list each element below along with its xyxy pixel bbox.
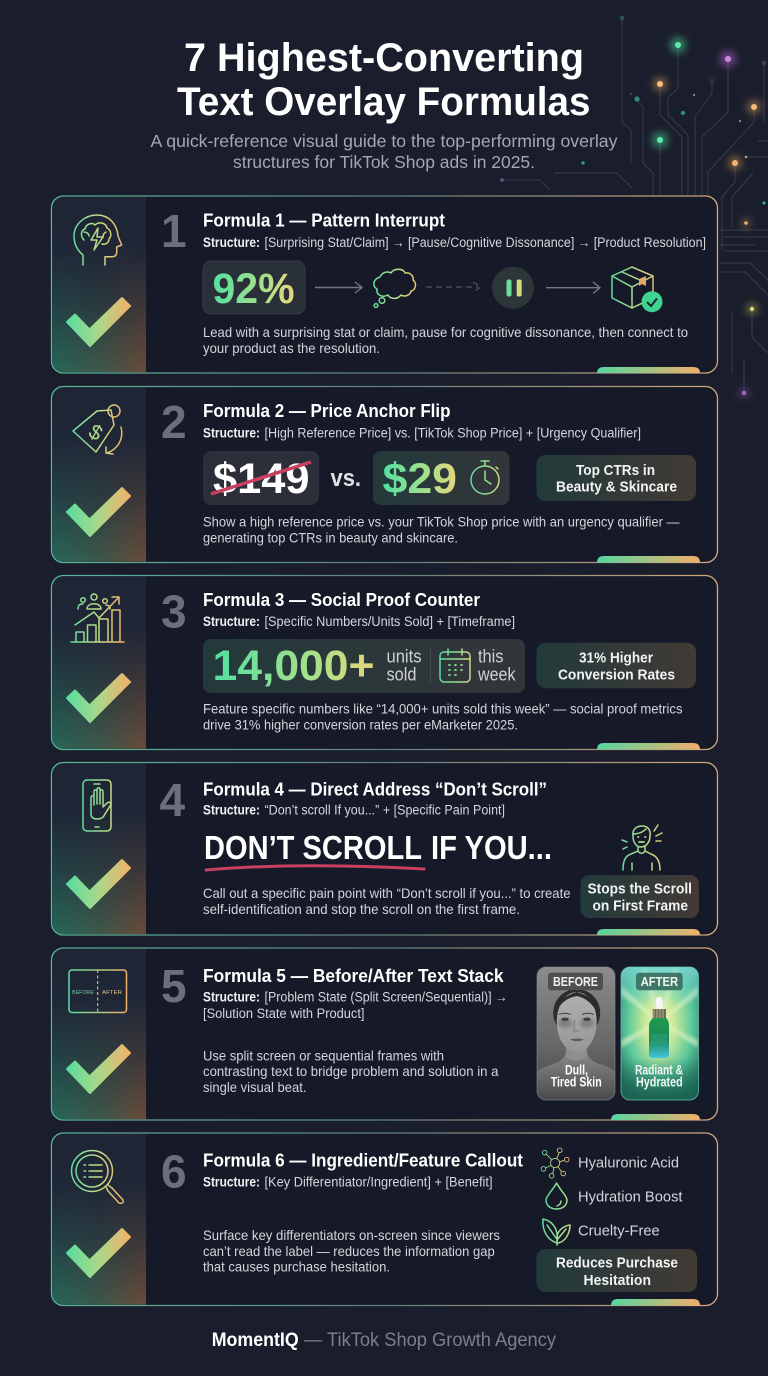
description: that causes purchase hesitation. [203,1259,390,1275]
callout: stops the scroll: Stops the Scroll [588,881,692,898]
accent tab [597,929,700,935]
before card with portrait [537,967,615,1100]
headline: don't scroll if you: DON’T SCROLL [204,829,422,866]
panel: formula 1 [52,196,718,373]
description: Feature specific numbers like “14,000+ units sold this week” — social proof metrics [203,700,682,716]
panel: formula 2 [52,386,718,562]
structure line: Structure: [203,1175,260,1190]
headline: don't scroll if you [204,829,552,870]
callout: top CTRs: Top CTRs in [576,462,655,479]
callout: higher conversion: Conversion Rates [558,666,675,683]
panel: formula 6 [52,1133,718,1306]
icon: before after split: BEFORE [72,990,94,996]
number: 6 [161,1146,187,1198]
icon: price tag [73,405,122,454]
arrow [315,282,362,293]
number: 2 [161,396,187,448]
icon: phone with hand [83,780,111,831]
feature: cruelty free [543,1219,660,1245]
description: Call out a specific pain point with “Don’t scroll if you...” to create [203,885,571,901]
new price box [373,451,510,505]
structure lines: [Problem State (Split Screen/Sequential)] → [264,989,508,1004]
description: Surface key differentiators on-screen since viewers [203,1227,500,1243]
description: can’t read the label — reduces the information gap [203,1243,495,1259]
before card with portrait: Tired Skin [551,1075,602,1090]
number: 1 [161,205,187,257]
description [203,324,688,356]
after card with serum bottle: AFTER [641,974,679,989]
heading: Formula 3 — Social Proof Counter [203,590,480,610]
description: single visual beat. [203,1079,306,1095]
subtitle: A quick-reference visual guide to the top-performing overlay [150,131,618,151]
old price box: $149 [213,455,310,503]
icon: check mark [67,860,130,908]
feature: hyaluronic acid [541,1148,679,1178]
after card with serum bottle: Radiant & [635,1062,683,1077]
feature: hydration boost: Hydration Boost [578,1189,683,1206]
icon: thought cloud [374,269,415,307]
accent tab [597,556,700,562]
counter box: sold [386,665,416,685]
structure line: [Key Differentiator/Ingredient] + [Benefit] [264,1175,492,1190]
description [203,514,680,546]
counter box: week [477,665,516,685]
new price box: $29 [382,455,457,503]
heading: Formula 2 — Price Anchor Flip [203,401,450,421]
description [203,700,682,732]
heading: Formula 5 — Before/After Text Stack [203,966,504,986]
icon: product box with check [612,267,662,312]
vs label: vs. [330,465,361,492]
number: 5 [161,960,187,1012]
number: 4 [160,774,186,826]
description: generating top CTRs in beauty and skincare. [203,530,458,546]
structure line: Structure: [203,803,260,818]
subtitle [150,131,618,172]
panel: formula 4 [52,762,718,935]
description: self-identification and stop the scroll on the first frame. [203,901,520,917]
accent tab [597,367,700,373]
callout: stops the scroll [580,875,699,918]
description [203,1047,499,1095]
heading: Formula 1 — Pattern Interrupt [203,211,445,231]
callout: top CTRs [536,455,696,501]
icon: before after split: AFTER [102,990,122,996]
before card with portrait: BEFORE [553,974,598,989]
icon: check mark [67,488,130,536]
counter box: this [478,647,504,667]
callout: reduces purchase hesitation: Hesitation [584,1272,651,1289]
icon: check mark [67,674,130,722]
icon: calendar [440,649,470,682]
accent tab [611,1114,700,1120]
stat box 92%: 92% [212,265,294,313]
icon: magnifier with list [72,1150,123,1203]
description: your product as the resolution. [203,340,380,356]
counter box: 14,000+ [212,642,374,690]
heading: Formula 6 — Ingredient/Feature Callout [203,1151,523,1171]
structure line: [Specific Numbers/Units Sold] + [Timeframe] [264,614,515,629]
icon: check mark [67,1045,130,1093]
feature: hydration boost [546,1183,683,1209]
description [203,1227,500,1275]
dashed arrow [426,282,481,292]
structure line: [High Reference Price] vs. [TikTok Shop Price] + [Urgency Qualifier] [264,425,641,440]
panel: formula 3 [52,576,718,750]
feature: hyaluronic acid: Hyaluronic Acid [578,1155,679,1172]
counter box [203,639,525,693]
arrow [546,282,600,294]
structure line: Structure: [203,235,260,250]
callout: higher conversion: 31% Higher [579,649,653,666]
structure line: Structure: [203,425,260,440]
icon: check mark [67,298,130,346]
description: Lead with a surprising stat or claim, pause for cognitive dissonance, then connect to [203,324,688,340]
description [203,885,571,917]
counter box: units [386,647,422,667]
callout: reduces purchase hesitation [536,1249,697,1292]
footer: — TikTok Shop Growth Agency [304,1330,556,1351]
description: Show a high reference price vs. your TikTok Shop price with an urgency qualifier — [203,514,680,530]
structure lines: Structure: [203,989,260,1004]
description: contrasting text to bridge problem and solution in a [203,1063,499,1079]
structure lines [203,989,508,1021]
circuit board background decoration [500,16,768,398]
icon: surprised person [622,825,662,870]
icon: before after split [69,970,126,1012]
icon: pause circle [492,267,534,309]
panel: formula 5 [52,948,718,1120]
callout: reduces purchase hesitation: Reduces Purchase [556,1255,678,1272]
after card with serum bottle: Hydrated [636,1075,683,1090]
title: 7 Highest-Converting [184,36,584,80]
icon: stopwatch [471,461,499,494]
headline: don't scroll if you: IF YOU... [431,829,552,866]
callout: higher conversion [536,643,696,688]
feature: cruelty free: Cruelty-Free [578,1222,660,1239]
before card with portrait: Dull, [565,1062,588,1077]
icon: growth chart with people [71,594,124,642]
icon: brain head with lightning [74,215,122,265]
subtitle: structures for TikTok Shop ads in 2025. [233,152,535,172]
footer: MomentIQ [212,1330,299,1351]
callout: stops the scroll: on First Frame [592,898,688,915]
description: drive 31% higher conversion rates per eMarketer 2025. [203,716,518,732]
callout: top CTRs: Beauty & Skincare [556,479,677,496]
structure line: [Surprising Stat/Claim] → [Pause/Cognitive Dissonance] → [Product Resolution] [264,235,706,250]
heading: Formula 4 — Direct Address “Don’t Scroll” [203,779,547,799]
icon: price tag: $ [85,420,107,446]
accent tab [597,743,700,750]
title: Text Overlay Formulas [177,80,590,124]
structure lines: [Solution State with Product] [203,1006,364,1021]
structure line: Structure: [203,614,260,629]
icon: check mark [67,1229,130,1277]
after card with serum bottle [621,967,698,1100]
number: 3 [161,586,187,638]
accent tab [611,1299,700,1306]
description: Use split screen or sequential frames with [203,1047,444,1063]
structure line: “Don’t scroll If you...” + [Specific Pain Point] [264,803,505,818]
title [177,36,590,124]
